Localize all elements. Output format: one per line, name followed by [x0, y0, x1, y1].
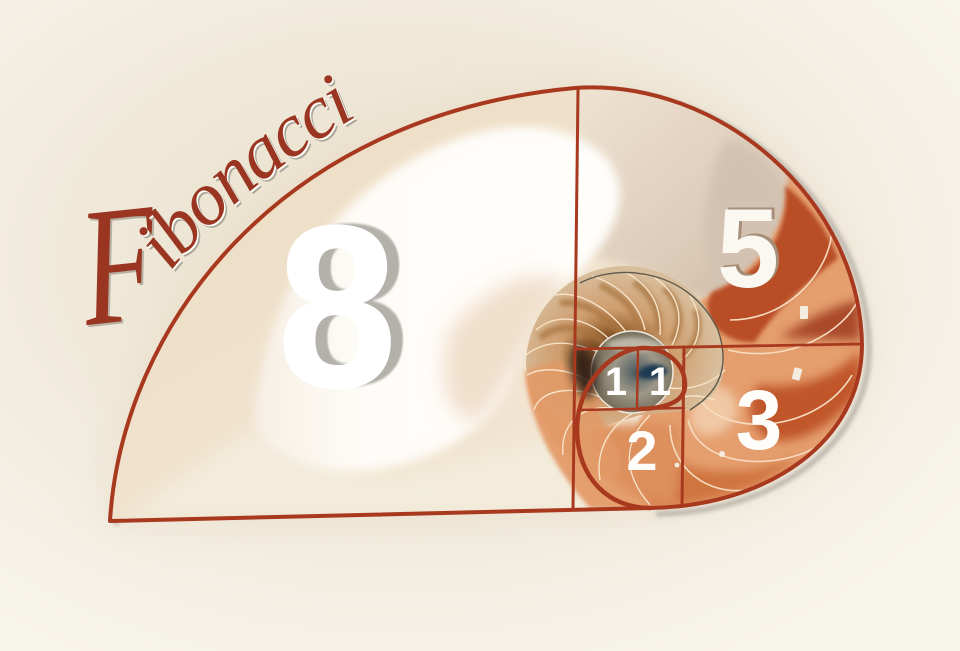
upper right tan shell	[598, 107, 790, 300]
brown chamber shading	[540, 282, 698, 356]
number 1 right: 1	[649, 360, 671, 404]
vertical 2/3 divider	[682, 347, 684, 505]
grey-tan upper whorl	[708, 142, 773, 232]
inner spiral	[577, 348, 685, 508]
5 face: 5	[717, 186, 779, 311]
soft halo around the spiral	[110, 87, 862, 521]
dark red band upper	[708, 185, 838, 342]
chamber ribs in the disc	[526, 272, 725, 505]
title word shadow: ibonacci	[143, 78, 357, 272]
chamber ribs in the outer whorl	[670, 230, 858, 491]
number 1 left: 1	[605, 360, 627, 404]
vertical 8/5 divider	[573, 90, 578, 509]
inner core of the shell	[591, 331, 673, 413]
lower left pale area	[145, 436, 570, 516]
5 shadow: 5	[720, 184, 782, 309]
upper core highlight	[605, 338, 668, 351]
outline of the spiral disc	[580, 273, 723, 410]
dark red band middle	[750, 350, 860, 441]
horizontal 5/3 divider	[575, 344, 860, 349]
outer spiral with baseline	[110, 87, 862, 521]
main spiral disc	[526, 266, 724, 430]
title word highlight: ibonacci	[142, 78, 356, 270]
number 2: 2	[626, 419, 658, 482]
title capital face: F	[71, 169, 168, 362]
title: Fibonacci	[71, 75, 357, 364]
number 5	[717, 184, 782, 311]
orange band around label 2	[588, 420, 680, 506]
warm nacre shading	[444, 276, 570, 420]
disc orange lower	[527, 360, 622, 478]
drop shadow of the spiral	[116, 91, 869, 525]
title capital shadow: F	[73, 171, 170, 364]
nacre white body	[254, 127, 620, 471]
shell interior ground	[112, 90, 640, 519]
8 shadow: 8	[291, 177, 409, 434]
8 face: 8	[278, 179, 396, 436]
golden spiral lines	[110, 87, 862, 521]
pale chamber beside label 3	[690, 383, 737, 436]
number 8	[278, 177, 409, 436]
nautilus shell	[100, 80, 870, 520]
title word face: ibonacci	[140, 75, 354, 269]
dark core eye	[636, 364, 668, 379]
vertical 1/1 divider	[637, 349, 638, 409]
horizontal 1/2 divider	[578, 408, 684, 410]
number 3: 3	[736, 373, 782, 467]
siphuncle tubes	[675, 306, 808, 467]
red band beside the label 5	[780, 300, 860, 340]
orange chamber field	[525, 175, 864, 512]
dark whorl shadow	[571, 345, 596, 400]
orange band lower	[645, 456, 796, 506]
